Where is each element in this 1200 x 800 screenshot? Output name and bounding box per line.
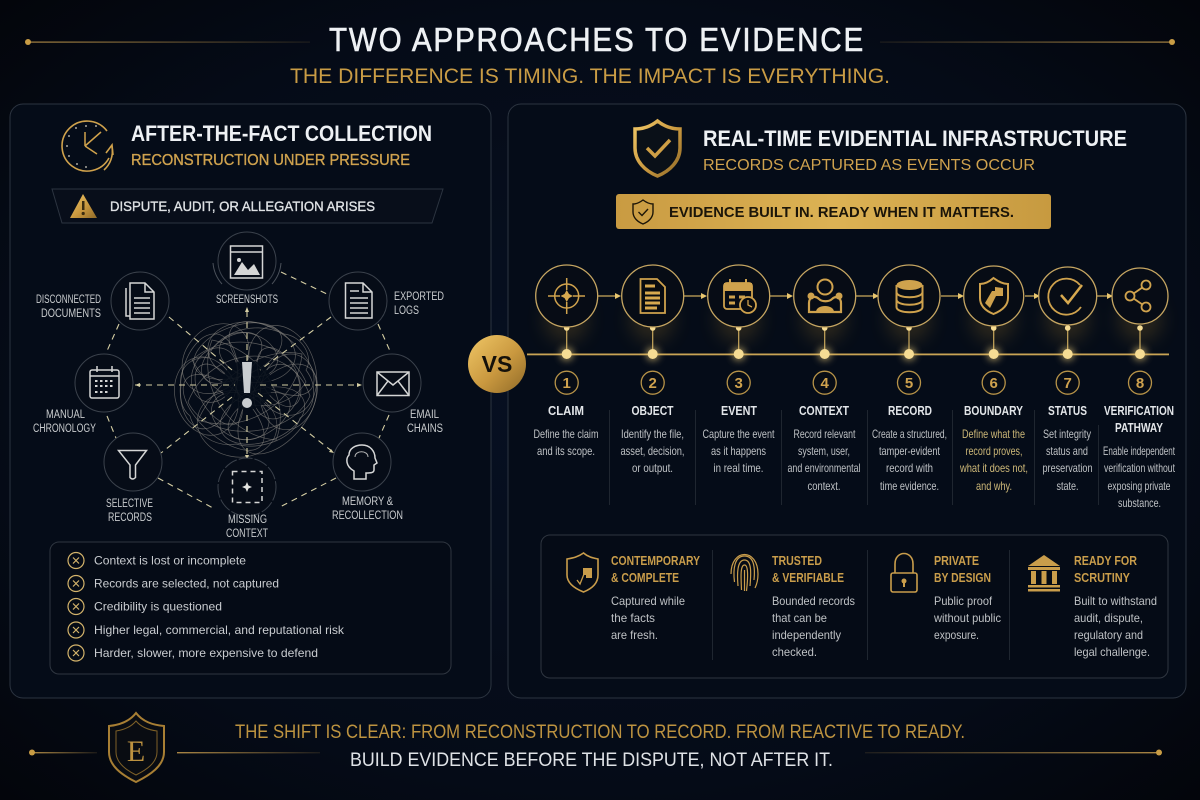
benefit: ready for scrutiny <box>1028 554 1157 659</box>
benefit: contemporary and complete: CONTEMPORARY <box>611 554 701 568</box>
step 7: status: preservation <box>1042 461 1092 475</box>
footer white line: BUILD EVIDENCE BEFORE THE DISPUTE, NOT AFTER IT. <box>350 750 833 771</box>
subtitle: THE DIFFERENCE IS TIMING. THE IMPACT IS EVERYTHING. <box>290 65 890 88</box>
label: MEMORY & <box>342 496 393 508</box>
evidence scatter diagram <box>33 232 444 540</box>
risk list text: Records are selected, not captured <box>94 576 279 590</box>
VS badge: VS <box>482 351 512 377</box>
step 5: record: 5 <box>905 375 913 392</box>
node: email chains <box>363 354 443 435</box>
step 1: claim: Define the claim <box>534 427 598 441</box>
footer gold line: THE SHIFT IS CLEAR: FROM RECONSTRUCTION TO RECORD. FROM REACTIVE TO READY. <box>235 722 965 743</box>
step 6: boundary: BOUNDARY <box>964 404 1024 418</box>
benefit: private by design: BY DESIGN <box>934 571 991 585</box>
step 4: context: system, user, <box>798 444 850 458</box>
benefit: private by design: without public <box>933 611 1001 625</box>
dark core <box>222 360 272 410</box>
label: EMAIL <box>410 409 440 421</box>
benefit: ready for scrutiny: legal challenge. <box>1074 645 1150 659</box>
step 8: verification pathway: exposing private <box>1108 479 1171 493</box>
step 1: claim: 1 <box>563 375 571 392</box>
benefit: private by design: PRIVATE <box>934 554 979 568</box>
label <box>407 409 443 435</box>
icon: banner shield <box>633 200 653 224</box>
benefit: contemporary and complete: the facts <box>611 611 655 625</box>
label: DOCUMENTS <box>41 308 101 320</box>
step 8: verification pathway: VERIFICATION <box>1104 404 1174 418</box>
VS badge <box>468 335 526 393</box>
footer emblem: E <box>127 735 145 768</box>
step 7: status: 7 <box>1064 375 1072 392</box>
label: MANUAL <box>46 409 85 421</box>
step 4: context <box>788 265 860 493</box>
step 7: status: state. <box>1056 479 1078 493</box>
label: MISSING <box>228 514 267 526</box>
node: disconnected documents <box>36 272 169 330</box>
benefit: ready for scrutiny: READY FOR <box>1074 554 1137 568</box>
label <box>332 496 403 522</box>
step 2: object: 2 <box>649 375 657 392</box>
label: CHRONOLOGY <box>33 423 96 435</box>
step 8: verification pathway: 8 <box>1136 375 1144 392</box>
risk checklist <box>50 542 451 674</box>
benefit: contemporary and complete: & COMPLETE <box>611 571 679 585</box>
node: memory and recollection <box>332 433 403 522</box>
step 3: event: Capture the event <box>702 427 775 441</box>
benefit: private by design: exposure. <box>934 628 979 642</box>
gold banner <box>616 194 1051 229</box>
step 5: record: record with <box>886 461 933 475</box>
risk list text <box>94 554 345 660</box>
step 1: claim: and its scope. <box>537 444 595 458</box>
step 7: status: Set integrity <box>1043 427 1091 441</box>
node dots <box>562 325 1145 359</box>
benefit: trusted and verifiable: TRUSTED <box>772 554 822 568</box>
label: CONTEXT <box>226 528 268 540</box>
step 4: context: Record relevant <box>794 427 856 441</box>
banner text: EVIDENCE BUILT IN. READY WHEN IT MATTERS. <box>669 204 1014 221</box>
benefit: trusted and verifiable <box>731 554 855 659</box>
label: SELECTIVE <box>106 498 153 510</box>
step 3: event: in real time. <box>714 461 764 475</box>
node: screenshots <box>213 232 281 306</box>
step connectors <box>567 293 1140 354</box>
benefit: private by design: Public proof <box>934 594 993 608</box>
step 6: boundary: and why. <box>976 479 1012 493</box>
benefit: ready for scrutiny: regulatory and <box>1074 628 1143 642</box>
label: RECOLLECTION <box>332 510 403 522</box>
glow backdrop <box>544 298 1162 342</box>
banner text: DISPUTE, AUDIT, OR ALLEGATION ARISES <box>110 198 375 214</box>
step 1: claim <box>534 265 598 458</box>
step 2: object: or output. <box>632 461 673 475</box>
step 8: verification pathway: PATHWAY <box>1115 421 1164 435</box>
panel heading: REAL-TIME EVIDENTIAL INFRASTRUCTURE <box>703 126 1127 151</box>
node: missing context <box>218 458 276 540</box>
node: selective records <box>104 433 162 524</box>
step 3: event: EVENT <box>721 404 757 418</box>
label <box>394 291 444 317</box>
benefit: ready for scrutiny: Built to withstand <box>1074 594 1157 608</box>
footer emblem <box>109 713 164 782</box>
step 5: record: tamper-evident <box>879 444 941 458</box>
node: exported logs <box>329 272 444 330</box>
benefit: contemporary and complete: Captured while <box>611 594 685 608</box>
step 2: object: OBJECT <box>632 404 674 418</box>
step 6: boundary: 6 <box>990 375 998 392</box>
step 7: status <box>1039 267 1097 493</box>
label <box>36 294 101 320</box>
step 4: context: CONTEXT <box>799 404 849 418</box>
step 5: record <box>872 265 947 493</box>
icon: clock <box>62 121 113 171</box>
panel: real-time evidential infrastructure <box>508 104 1186 698</box>
step 5: record: Create a structured, <box>872 427 947 441</box>
step 7: status: status and <box>1046 444 1088 458</box>
label <box>226 514 268 540</box>
step 5: record: RECORD <box>888 404 932 418</box>
trigger banner <box>52 189 443 223</box>
step 8: verification pathway: substance. <box>1118 496 1161 510</box>
benefits box <box>541 535 1168 678</box>
risk icons <box>68 552 84 661</box>
header <box>25 21 1175 88</box>
label <box>33 409 96 435</box>
step 1: claim: CLAIM <box>548 404 584 418</box>
benefit: ready for scrutiny: audit, dispute, <box>1074 611 1143 625</box>
step 7: status: STATUS <box>1048 404 1087 418</box>
label: RECORDS <box>108 512 152 524</box>
step 6: boundary: what it does not, <box>959 461 1028 475</box>
tangled centre <box>165 307 333 468</box>
panel subheading: RECORDS CAPTURED AS EVENTS OCCUR <box>703 157 1035 174</box>
step 2: object <box>620 265 684 475</box>
step 6: boundary: record proves, <box>966 444 1022 458</box>
panel subheading: RECONSTRUCTION UNDER PRESSURE <box>131 152 410 169</box>
step 6: boundary: Define what the <box>962 427 1025 441</box>
benefit: trusted and verifiable: & VERIFIABLE <box>772 571 844 585</box>
benefit: private by design <box>891 554 1001 642</box>
risk list text: Higher legal, commercial, and reputational risk <box>94 623 345 637</box>
label: CHAINS <box>407 423 443 435</box>
icon: warning triangle <box>70 194 97 218</box>
step 3: event <box>702 265 775 475</box>
panel heading: AFTER-THE-FACT COLLECTION <box>131 121 432 146</box>
risk list text: Credibility is questioned <box>94 600 222 614</box>
step 6: boundary <box>959 266 1028 493</box>
axis line <box>527 354 1169 355</box>
step 8: verification pathway <box>1103 268 1175 510</box>
benefit: contemporary and complete <box>567 553 701 642</box>
benefit: contemporary and complete: are fresh. <box>611 628 658 642</box>
node glows <box>561 348 1146 360</box>
label: SCREENSHOTS <box>216 294 278 306</box>
label: LOGS <box>394 305 419 317</box>
step 3: event: 3 <box>735 375 743 392</box>
benefit: trusted and verifiable: independently <box>772 628 841 642</box>
label <box>106 498 153 524</box>
panel: after-the-fact collection <box>10 104 491 698</box>
risk list text: Harder, slower, more expensive to defend <box>94 646 318 660</box>
benefit: ready for scrutiny: SCRUTINY <box>1074 571 1131 585</box>
step 5: record: time evidence. <box>880 479 939 493</box>
icon: gold shield <box>635 121 680 176</box>
label: DISCONNECTED <box>36 294 101 306</box>
benefit: trusted and verifiable: checked. <box>772 645 817 659</box>
benefit: trusted and verifiable: Bounded records <box>772 594 855 608</box>
dashed connectors <box>107 272 390 508</box>
step 4: context: 4 <box>821 375 830 392</box>
step 4: context: and environmental <box>788 461 860 475</box>
centre exclamation mark <box>242 362 252 408</box>
node: manual chronology <box>33 354 133 435</box>
eight-step timeline <box>527 265 1175 510</box>
step 8: verification pathway: verification without <box>1104 461 1175 475</box>
step 2: object: asset, decision, <box>620 444 684 458</box>
label: EXPORTED <box>394 291 444 303</box>
step 2: object: Identify the file, <box>621 427 684 441</box>
footer <box>29 713 1162 782</box>
benefit: trusted and verifiable: that can be <box>772 611 827 625</box>
step 4: context: context. <box>808 479 840 493</box>
step 3: event: as it happens <box>711 444 766 458</box>
risk list text: Context is lost or incomplete <box>94 554 246 568</box>
title: TWO APPROACHES TO EVIDENCE <box>329 21 865 58</box>
